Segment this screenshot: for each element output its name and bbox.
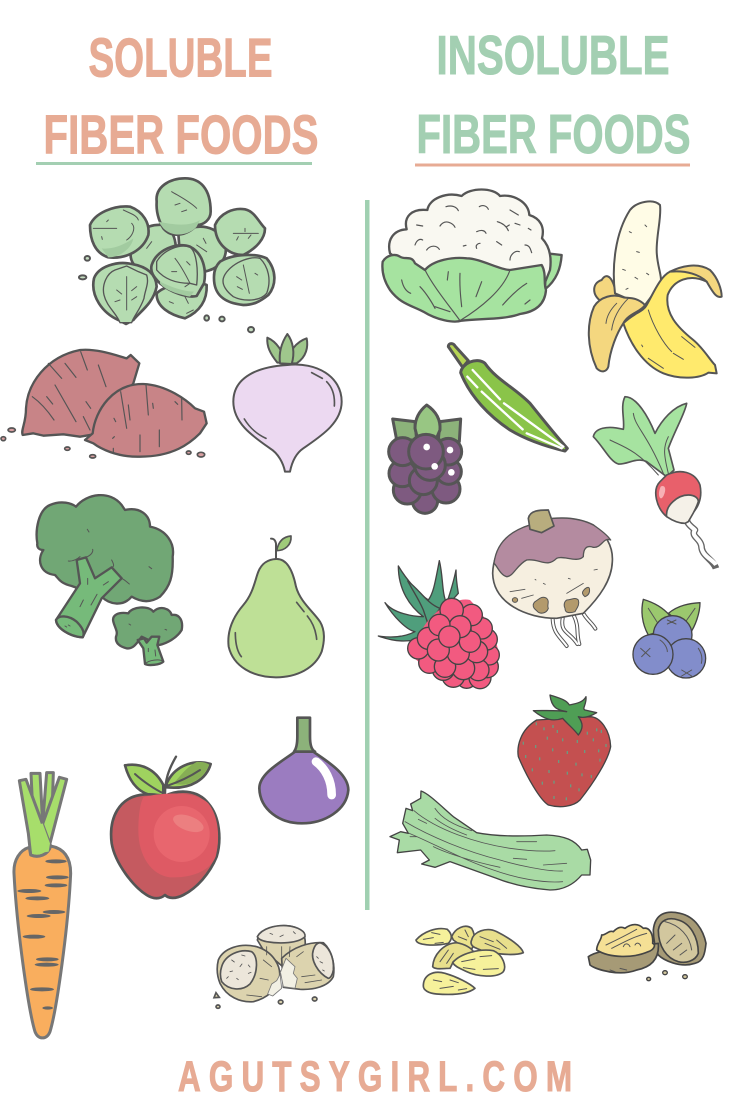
small broccoli floret bbox=[113, 607, 182, 665]
food: blackberry bbox=[389, 405, 462, 513]
heading: soluble fiber foods: SOLUBLE bbox=[88, 26, 272, 88]
apple body bbox=[111, 792, 219, 898]
heading: soluble fiber foods: FIBER FOODS bbox=[44, 104, 318, 166]
food: sweet potatoes bbox=[1, 350, 207, 458]
food: almonds bbox=[416, 926, 523, 994]
food: okra bbox=[448, 344, 567, 451]
food: banana bbox=[589, 201, 722, 378]
heading: soluble fiber foods bbox=[44, 26, 318, 166]
food: cauliflower bbox=[382, 190, 562, 322]
food: carrot bbox=[14, 773, 71, 1038]
apple stem bbox=[165, 757, 176, 795]
food: purple turnip bbox=[493, 510, 612, 646]
food: strawberry bbox=[518, 695, 611, 807]
food: hazelnuts bbox=[214, 926, 334, 1008]
food: broccoli bbox=[37, 495, 182, 665]
heading: insoluble fiber foods bbox=[416, 24, 690, 165]
large broccoli floret bbox=[37, 495, 173, 637]
turnip roots bbox=[553, 614, 595, 646]
apple leaves bbox=[125, 762, 211, 796]
hazelnut cracked flesh bbox=[268, 958, 297, 996]
food: fig bbox=[259, 718, 348, 823]
food: radish bbox=[593, 397, 716, 568]
food: pear bbox=[228, 536, 324, 677]
food: blueberries bbox=[633, 599, 706, 678]
food: raspberry bbox=[378, 561, 499, 689]
food: apple bbox=[111, 757, 219, 898]
food: brussels sprouts bbox=[79, 178, 274, 332]
food: celery bbox=[390, 791, 591, 890]
food: walnut bbox=[588, 912, 706, 981]
food: white turnip bbox=[233, 334, 342, 472]
footer: website: AGUTSYGIRL.COM bbox=[178, 1052, 580, 1100]
